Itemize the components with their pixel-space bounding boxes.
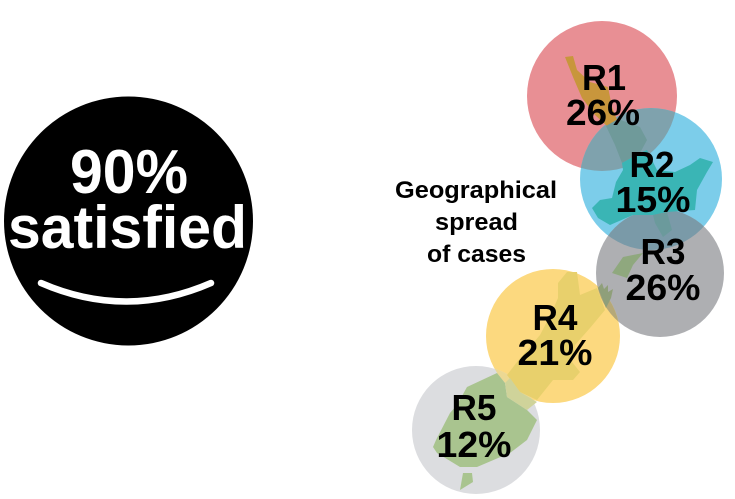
heading: geographical spread of cases: spread [435, 209, 518, 236]
label R2 15%: 15% [616, 179, 690, 220]
satisfaction badge [4, 96, 253, 346]
label R2 15%: R2 [630, 144, 674, 185]
label R1 26%: 26% [566, 92, 640, 133]
land: northern tip in R1 [565, 56, 617, 126]
smile [41, 283, 211, 302]
overlap R4 and R5 [494, 368, 532, 399]
overlap R3 and R4 [597, 286, 618, 322]
region R4 circle [486, 269, 620, 403]
land: southern island [460, 473, 473, 490]
headline: 90%: 90% [70, 138, 188, 207]
land: centre in R1 and R2 overlap [606, 119, 647, 163]
region R2 circle [580, 108, 722, 250]
label R3 26% [626, 231, 700, 308]
headline: satisfied: satisfied [8, 194, 247, 261]
label R2 15% [616, 144, 690, 220]
land: R4 and R5 overlap [505, 378, 537, 410]
region R1 circle [527, 21, 677, 171]
overlap R1 and R2 [580, 108, 676, 171]
land: R4 region [507, 272, 605, 400]
label R4 21%: R4 [532, 297, 578, 338]
heading: geographical spread of cases [395, 177, 557, 268]
land: R2 region [592, 150, 713, 225]
label R5 12%: 12% [436, 424, 512, 465]
land: R3 and R4 strait [598, 283, 613, 308]
land: R5 region [433, 373, 537, 467]
label R1 26%: R1 [582, 57, 626, 98]
label R5 12% [436, 387, 512, 465]
label R4 21% [518, 297, 592, 373]
heading: geographical spread of cases: Geographical [395, 177, 557, 204]
badge circle [4, 96, 253, 346]
heading: geographical spread of cases: of cases [427, 241, 526, 268]
label R3 26%: R3 [640, 231, 686, 272]
label R1 26% [566, 57, 640, 133]
region R3 circle [596, 209, 724, 337]
region R5 circle [412, 366, 540, 494]
land: R3 region [612, 253, 643, 278]
label R4 21%: 21% [518, 332, 592, 373]
regional map bubbles [412, 21, 724, 494]
overlap R2 and R3 [608, 211, 704, 250]
label R3 26%: 26% [626, 267, 700, 308]
label R5 12%: R5 [452, 387, 496, 428]
land: R2 and R3 overlap [653, 212, 672, 237]
